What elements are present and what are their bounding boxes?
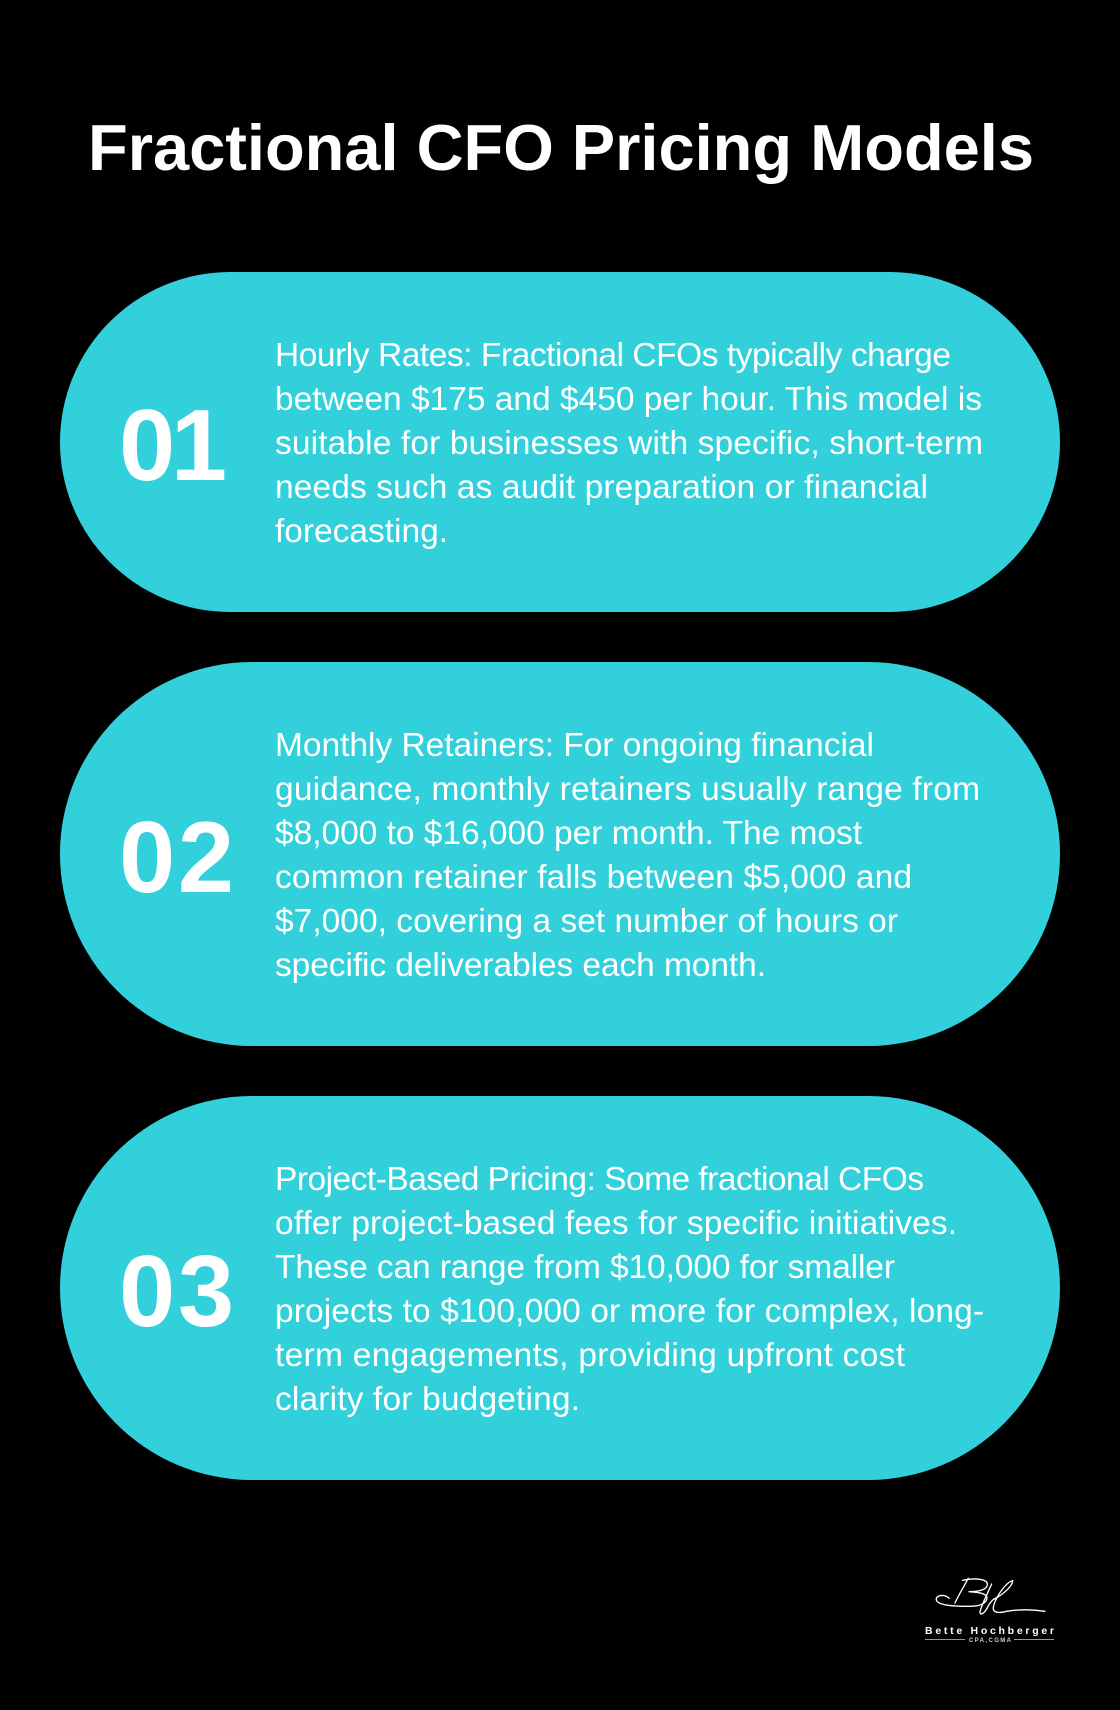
text block: monthly retainers: specific deliverables each month. xyxy=(275,947,766,984)
text block: hourly rates: suitable for businesses with specific, short-term xyxy=(275,425,983,462)
text block: project-based pricing: Project-Based Pricing: Some fractional CFOs xyxy=(275,1161,924,1198)
text block: hourly rates: Hourly Rates: Fractional CFOs typically charge xyxy=(275,337,951,374)
text block: monthly retainers: $7,000, covering a set number of hours or xyxy=(275,903,898,940)
logo name: Bette Hochberger xyxy=(925,1625,1054,1637)
text block: hourly rates xyxy=(275,337,983,550)
text block: monthly retainers: common retainer falls between $5,000 and xyxy=(275,859,912,896)
icon: signature mark xyxy=(936,1578,1045,1614)
pill background: project-based pricing xyxy=(60,1096,1060,1480)
text block: project-based pricing: These can range from $10,000 for smaller xyxy=(275,1249,895,1286)
text block: monthly retainers: Monthly Retainers: For ongoing financial xyxy=(275,727,874,764)
number 03: 03 xyxy=(119,1236,234,1348)
text block: monthly retainers xyxy=(275,727,980,984)
logo credentials: CPA,CGMA xyxy=(969,1638,1012,1644)
panel: project-based pricing xyxy=(60,1096,1060,1480)
text block: project-based pricing: clarity for budgeting. xyxy=(275,1381,580,1418)
text block: monthly retainers: guidance, monthly retainers usually range from xyxy=(275,771,980,808)
logo: Bette Hochberger signature xyxy=(925,1578,1054,1644)
text block: project-based pricing: projects to $100,000 or more for complex, long- xyxy=(275,1293,984,1330)
text block: project-based pricing xyxy=(275,1161,984,1418)
number 02: 02 xyxy=(119,802,234,914)
pill background: hourly rates xyxy=(60,272,1060,612)
text block: project-based pricing: offer project-based fees for specific initiatives. xyxy=(275,1205,957,1242)
panel: hourly rates xyxy=(60,272,1060,612)
number 01: 01 xyxy=(119,390,227,502)
panel: monthly retainers xyxy=(60,662,1060,1046)
text block: hourly rates: forecasting. xyxy=(275,513,448,550)
text block: project-based pricing: term engagements, providing upfront cost xyxy=(275,1337,906,1374)
title: Fractional CFO Pricing Models xyxy=(88,111,1034,184)
text block: hourly rates: between $175 and $450 per hour. This model is xyxy=(275,381,982,418)
text block: monthly retainers: $8,000 to $16,000 per month. The most xyxy=(275,815,863,852)
pill background: monthly retainers xyxy=(60,662,1060,1046)
text block: hourly rates: needs such as audit preparation or financial xyxy=(275,469,928,506)
